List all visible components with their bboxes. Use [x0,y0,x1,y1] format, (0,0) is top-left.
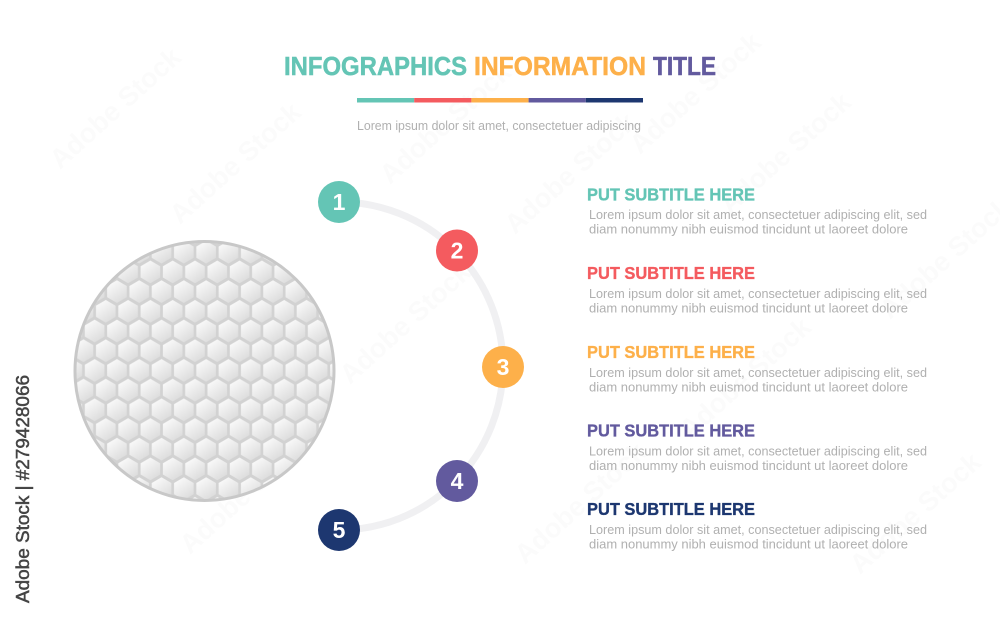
step 5 marker: 5 [333,517,346,543]
text: Adobe Stock [44,41,187,174]
item 5 text: Lorem ipsum dolor sit amet, consectetuer adipiscing elit, sed [589,523,927,537]
item 2 text: Lorem ipsum dolor sit amet, consectetuer adipiscing elit, sed [589,287,927,301]
stock id label: Adobe Stock | #279428066 [13,375,33,603]
title: INFORMATION [474,53,646,81]
text: Adobe Stock [714,86,857,219]
item 3 text: PUT SUBTITLE HERE [587,342,755,362]
step 3 marker [482,346,524,388]
step 3 marker: 3 [497,354,509,380]
text: Adobe Stock [374,56,517,189]
step 4 marker [436,460,478,502]
item 4 text: diam nonummy nibh euismod tincidunt ut laoreet dolore [589,459,908,473]
item 1 text: PUT SUBTITLE HERE [587,184,755,204]
text: Adobe Stock [164,96,307,229]
item 2 text: diam nonummy nibh euismod tincidunt ut laoreet dolore [589,302,908,316]
item 4 text: Lorem ipsum dolor sit amet, consectetuer adipiscing elit, sed [589,444,927,458]
text: Adobe Stock [624,26,767,159]
step 4 marker: 4 [451,468,464,494]
item 1 text: Lorem ipsum dolor sit amet, consectetuer adipiscing elit, sed [589,208,927,222]
item 1 text: diam nonummy nibh euismod tincidunt ut laoreet dolore [589,222,908,236]
item 5 text [587,499,927,552]
item 4 text [587,420,927,473]
title: TITLE [653,53,716,81]
item 2 text: PUT SUBTITLE HERE [587,263,755,283]
item 5 text: PUT SUBTITLE HERE [587,499,755,519]
step 5 marker [318,509,360,551]
item 5 text: diam nonummy nibh euismod tincidunt ut laoreet dolore [589,538,908,552]
step 1 marker: 1 [333,189,346,215]
text: Adobe Stock [499,106,642,239]
step 2 marker: 2 [451,238,463,264]
item 3 text: diam nonummy nibh euismod tincidunt ut laoreet dolore [589,380,908,394]
text: Adobe Stock [674,311,817,444]
text: Adobe Stock [334,256,477,389]
golf ball icon [75,242,334,500]
intro text: Lorem ipsum dolor sit amet, consectetuer adipiscing [357,119,641,133]
text: Adobe Stock [509,436,652,569]
item 3 text [587,342,927,394]
text: Adobe Stock [174,426,317,559]
item 2 text [587,263,927,316]
step 1 marker [318,181,360,223]
item 1 text [587,184,927,236]
connecting arc [339,202,503,530]
item 4 text: PUT SUBTITLE HERE [587,420,755,440]
title [284,53,716,81]
text: Adobe Stock [844,446,987,579]
title colour bar [357,98,643,102]
item 3 text: Lorem ipsum dolor sit amet, consectetuer adipiscing elit, sed [589,366,927,380]
step 2 marker [436,230,478,272]
title: INFOGRAPHICS [284,53,467,81]
